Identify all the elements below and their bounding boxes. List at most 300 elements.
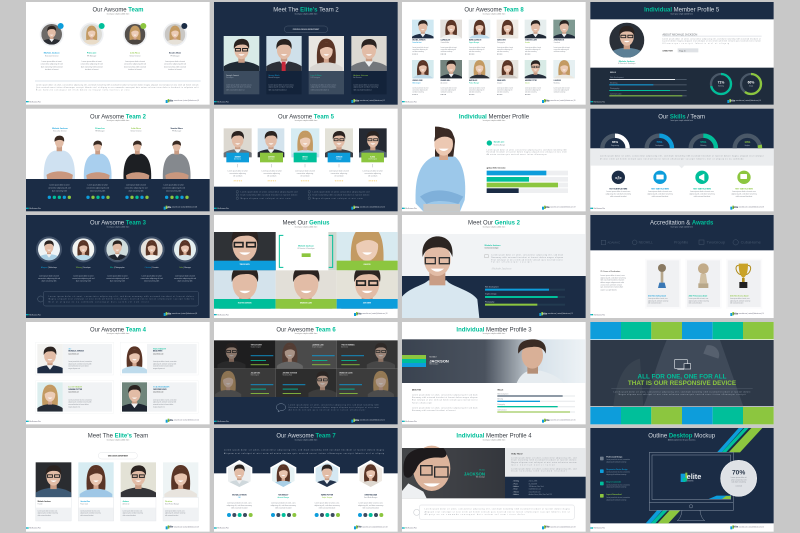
names and text: diam nonummy nibh [110,281,125,283]
speech note: Lorem ipsum dolor sit amet, consectetur adipiscing elit, sed diam nonummy nibh [289,403,379,406]
footer: www.elite.com | contact@elitesite.com | 07 [550,206,576,209]
team card 3: Art Director [123,502,130,505]
name block: Marketing Manager [494,143,506,146]
feature list: Lorem ipsum dolor sit amet, consectetur [606,496,631,499]
member 5: ELISSA [370,155,375,158]
dark portrait tile 2: LAURENA LANE [312,343,324,346]
profile card 3 [36,381,114,413]
footer: www.elite.com | contact@elitesite.com | 05 [550,99,576,102]
member 4: JOHNSON [336,156,342,158]
member text columns: Sandra Mane [169,52,182,55]
member 5 [358,128,387,183]
award card 2: Lorem ipsum dolor sit amet, cons [689,297,709,300]
title: Outline Desktop Mockup [648,434,716,440]
speech note [276,403,379,412]
contact panel: mail@elitesite.com [529,488,542,491]
team card 4: Andrew Johnson [353,74,368,77]
team card 2: nibh euismod tincidunt ut [268,88,287,91]
captions row 1: consectetur adipiscing elit [554,48,570,51]
member 1: elit sed diam [233,174,243,177]
team card 4: Lorem ipsum dolor sit amet, cons [165,509,185,512]
captions row 1: Lorem ipsum dolor sit amet [412,46,429,49]
subtitle: Add description text for your business [668,438,696,441]
team card 4: nibh euismod tincidunt [165,514,179,517]
hello panel: Magna aliquam erat volutpat ut wisi enim ad minim veniam [511,461,577,464]
footer [214,525,388,530]
captions row 1: sed diam nonummy [412,51,424,53]
team card 2 [78,462,114,521]
about block: Lorem ipsum dolor sit amet, consectetur adipiscing elit, sed diam nonummy nibh euismod tincidunt ut [662,37,761,40]
skill captions: adipiscing elit, sed diam nonummy [689,192,715,195]
profile card 3: SUSANNE POTTER [68,388,83,391]
member 1: Lorem ipsum dolor sit amet [228,170,248,173]
footer: elite [167,312,172,315]
member text columns: diam nonummy nibh euismod [124,66,146,68]
footer: elite [733,312,739,315]
footer: www.elite.com | contact@elitesite.com | 19 [550,525,576,528]
tile: dark portrait [214,226,276,282]
member 3: Designer [302,158,308,161]
team card 1: Michale Jackson [38,501,51,503]
member captions [227,493,383,510]
70% badge: 70% [732,470,745,477]
donut 71%: Marketing [718,84,724,87]
captions row 1: consectetur adipiscing elit [497,48,513,51]
caption: Magna aliquam erat volutpat ut wisi enim ad minim veniam quis nostrud exerci tation ullamcorper suscipit [619,393,746,396]
member captions: Associate Manager [278,496,290,499]
contact panel: ▫ Address [513,485,519,488]
subtitle: Insert your simple subtitle here [107,438,129,441]
captions row 2: ■ ■ ■ ■ [469,94,474,96]
lorem columns: Lorem ipsum dolor sit amet [88,184,108,187]
name block [487,140,506,146]
captions row 2: Lorem ipsum dolor sit amet [441,86,457,89]
skill captions: adipiscing elit, sed diam nonummy [606,192,631,195]
captions row 2: EDWARD BELL [441,79,451,82]
names: Sandra Mane [170,127,184,130]
footer: Elite Business Plan [217,100,229,103]
footer: elite [354,99,360,102]
bio: Michale Jackson [492,267,512,271]
member text columns: consectetur adipiscing elit sed [41,63,63,66]
captions row 2: Lorem ipsum dolor sit amet [469,86,486,89]
banner name: Michale [479,469,485,471]
footer: www.elite.com | contact@elitesite.com | 04 [360,206,385,209]
member captions: Lorem ipsum dolor sit amet, cons [358,501,383,504]
footer: Elite Business Plan [405,207,417,210]
team card 1: Joseph Jonest [226,74,239,77]
lorem columns: consectetur adipiscing elit, sed [48,186,71,189]
skills band [590,68,774,105]
feature list: Responsive Device Design [606,469,627,471]
tile: beige portrait: BRANDON CLARK [300,302,312,305]
member 2: Lorem ipsum dolor sit amet [262,170,282,173]
captions row 2: sed diam nonummy [412,91,424,93]
member 4: Manager [336,158,342,161]
dark tablet photo [590,340,774,406]
footer: Elite Business Plan [217,207,229,210]
captions row 1: LAURA ELLIOT [441,39,451,42]
captions row 1: Lorem ipsum dolor sit amet [497,46,514,49]
member captions: Social Media Manager [364,496,378,499]
description: Ad minim veniam quis nostrud exerci tation ullamcorper [487,153,547,156]
captions row 1: ■ ■ ■ ■ [441,54,446,56]
bottom colour blocks [590,407,774,424]
profile card 1: www.elitesite.com [68,352,80,355]
footer [590,312,764,316]
lorem columns: Lorem ipsum dolor sit amet [164,184,184,187]
footer: www.elite.com | contact@elitesite.com | 12 [360,419,385,422]
hello panel: Diam nonummy nibh euismod tincidunt [511,470,567,473]
icon: megaphone [695,171,709,184]
about block: Laoreet dolore magna aliquam erat volutpat ut wisi enim ad minim veniam quis nostrud exerci tation [662,40,761,43]
team card 4: Christina [165,500,172,503]
slogan [628,373,736,387]
member captions: Graphic Designer [322,496,333,499]
skill bars: Photography [485,300,495,303]
member 5: Chief Designer [368,158,378,161]
lorem columns: diam nonummy nibh [166,190,181,192]
profile card 3: magna aliquam erat [68,405,81,408]
subtitle: Insert your simple subtitle here [295,119,317,122]
footer: www.elite.com | contact@elitesite.com | 10 [362,312,388,315]
member captions: adipiscing elit, sed diam nonummy [358,504,383,507]
footer: elite [545,419,550,422]
names and text: consectetur adipiscing elit sed [106,277,128,280]
70% badge: Lorem ipsum dolor sit [731,476,747,479]
portrait banner [402,446,505,498]
member text columns: tincidunt ut laoreet [85,68,99,71]
member text columns: diam nonummy nibh euismod [164,66,186,68]
tile: beige portrait [276,264,337,320]
team card 2: Lorem ipsum dolor sit amet, cons [80,509,100,512]
note box [414,505,574,519]
round portrait 1 [40,22,64,46]
team card 3: adipiscing elit, sed diam nonummy [123,512,143,515]
captions row 2: consectetur adipiscing elit [469,88,485,91]
bio: Erat volutpat ut wisi enim ad minim veniam quis nostrud exerci [491,258,564,261]
lorem columns: consectetur adipiscing elit, sed [125,186,147,189]
member captions: MICHAEL JOHNSON [232,493,247,496]
captions row 1: consectetur adipiscing elit [412,48,428,51]
contact panel: ▫ Email [513,489,518,491]
captions row 2: ■ ■ ■ ■ [497,94,502,96]
title: Our Awesome Team 8 [464,8,524,14]
footer: elite [169,526,174,529]
about block: CONNECT WITH: [662,50,674,52]
profile card 3: adipiscing elit, sed diam nonummy nibh [68,401,92,404]
captions row 2: sed diam nonummy [441,91,453,93]
skill captions: Lorem ipsum dolor sit amet cons [606,190,630,193]
subtitle: Insert your simple subtitle here [295,332,317,335]
feature list [600,457,631,501]
names and text: diam nonummy nibh [76,281,91,283]
subtitle: Insert your simple subtitle here [295,12,317,15]
note box: Aliquam erat volutpat ut wisi enim ad minim veniam quis nostrud exerci tation ullamcorper suscipit lobortis nisl ut [425,510,570,513]
skills: Marketing [497,398,503,401]
about block: Ullamcorper suscipit lobortis nisl ut aliquip [662,42,729,45]
feature list: Easy to Customize [606,481,621,484]
intro text: Aliquam erat volutpat ut wisi enim ad minim veniam quis nostrud exerci tation ullamcorper suscipit lobortis nisl ut aliquip [224,452,384,455]
slide: Our Awesome Team 6 [214,322,398,424]
footer: Elite Business Plan [594,100,605,103]
subtitle: Insert your simple subtitle here [295,225,317,228]
skill captions: nibh euismod tincidunt [736,195,753,198]
captions row 2: Designer [497,81,503,84]
member 1 [223,128,252,183]
skills bars: Marketing [610,81,617,84]
woman figure [416,127,465,211]
footer: Elite Business Plan [29,313,41,316]
captions row 1: Senior Architect [412,41,422,44]
team card 1 [36,462,71,521]
contact panel: www.elitesite.com [529,490,541,493]
member text columns: diam nonummy nibh euismod [81,66,103,68]
bullet rows: Lorem ipsum dolor sit amet, consectetur adipiscing elit sed [313,190,369,193]
award card 2: adipiscing elit, sed diam nonummy [689,299,709,302]
feature list: adipiscing elit sed diam nonummy [606,473,627,476]
subtitle: Insert your simple subtitle here [483,332,505,335]
contact panel: ▫ Phone [513,483,518,485]
member text columns: consectetur adipiscing elit sed [124,63,146,66]
contact panel: 24-Dec-1985 [529,481,537,483]
skills [497,389,575,413]
title: Meet The Elite's Team [88,434,148,440]
team card 2: adipiscing elit sed diam nonummy [268,86,293,89]
bio [484,245,564,271]
hello panel: Hello There! [511,453,523,456]
title: Our Awsome Team 5 [278,114,335,120]
team card 4: adipiscing elit sed diam nonummy [353,86,378,89]
team card 1: adipiscing elit sed diam nonummy [226,86,251,89]
footer: elite [733,206,739,209]
dark portrait tile 6 [337,369,398,397]
skills bars: Web Development [610,76,624,79]
captions row 1: Content Editor [441,41,450,44]
description: Euismod tincidunt ut laoreet dolore magna aliquam erat volutpat ut wisi enim [487,151,567,154]
member text columns: Senior Director [129,55,141,58]
footer: elite [730,99,736,102]
captions row 2: sed diam nonummy [469,91,481,93]
hello panel: Quis nostrud exerci tation [511,463,555,466]
header band [214,428,398,473]
member captions: CEO [238,497,241,499]
captions row 1: sed diam nonummy [525,51,537,53]
footer: elite [545,206,550,209]
diagonal stripes top [717,428,762,452]
footer: www.elite.com | contact@elitesite.com | 17 [174,525,199,528]
speech note: Euismod tincidunt ut laoreet dolore magna aliquam erat volutpat ut wisi enim [289,406,379,409]
profile card 4: www.elitesite.com [153,391,164,394]
footer [402,419,576,423]
names and text: Lorem ipsum dolor sit amet [107,275,128,278]
about block [662,32,762,52]
stripes and name: Web Developer [429,363,439,366]
footer: elite [542,312,548,315]
stripes and name: MICHALE [429,356,438,359]
names and text: Carla | Manager [179,267,191,269]
slide: Outline Desktop Mockup [590,428,774,532]
award card 3: adipiscing elit, sed diam nonummy [730,299,751,302]
footer: www.elite.com | contact@elitesite.com | 18 [362,525,388,528]
donut 60%: Design [749,85,753,87]
skill bars: Graphic Design [485,294,496,296]
subtitle: Insert your simple subtitle here [107,119,129,122]
captions row 2: Lorem ipsum dolor sit amet [412,86,429,89]
dark portrait tile 1 [214,340,276,369]
intro text: Lorem ipsum dolor sit amet, consectetur adipiscing elit, sed diam nonummy nibh euismod tincidunt ut laoreet dolore magna [224,449,384,452]
captions row 2: Lorem ipsum dolor sit amet [497,86,514,89]
navy base [26,179,210,211]
footer [402,99,576,103]
bullet rows: Diam nonummy nibh euismod tincidunt ut laoreet dolore [241,194,297,197]
member text columns [41,52,186,71]
captions row 2: Product Manager [469,81,480,84]
profile card 4: CHRISTINE DONEY [153,389,167,391]
names and text: Allegiant | Workshops [41,266,57,269]
dark portrait tile 3 [337,340,398,369]
partner logos: ADAMAC [607,241,621,245]
profile card 4 [120,381,198,413]
profile card 1: adipiscing elit, sed diam nonummy nibh [68,362,92,365]
subtitle: Insert your simple subtitle here [483,438,505,441]
footer: Elite Business Plan [29,527,41,530]
captions row 2: Lorem ipsum dolor sit amet [554,86,570,89]
skill captions: TEXT SUBTITLE HERE [609,188,628,190]
slide: Meet The Elite's Team [26,428,210,532]
grey middle band [402,234,586,276]
team card 1: nibh euismod tincidunt ut [226,88,245,91]
bullet rows: Diam nonummy nibh euismod tincidunt ut laoreet dolore [313,194,369,197]
donut values: 70% [656,140,663,144]
bio: Michale Jackson [485,245,501,247]
award card 3: Lorem ipsum dolor sit amet, cons [730,297,750,300]
skill bars: Web Development [485,285,499,288]
skill captions: Lorem ipsum dolor sit amet cons [690,190,714,193]
member 1: consectetur adipiscing [229,172,246,175]
member 3: Lorem ipsum dolor sit amet [295,170,316,173]
title: Meet The Elite's Team 2 [273,8,339,14]
profile card 2: BECA WHITE [153,350,162,353]
partner logos: TwoGroup [707,239,726,244]
slide: Meet Our Genius [214,215,398,320]
donut values: Marketing [700,144,707,147]
hello panel: Lorem ipsum dolor sit amet, consectetur adipiscing elit, sed [511,467,576,470]
bullet rows: Magna aliquam erat volutpat ut wisi enim [241,197,291,200]
profile card 2: adipiscing elit, sed diam nonummy nibh [153,362,176,365]
dark portrait tile 1: TREVOR SMITH [251,344,262,346]
member text columns: Lorem ipsum dolor sit amet [165,60,186,63]
award card 3: 2015 / Best Service Award [730,294,748,297]
member 3 [291,128,319,183]
names: Senior Director [130,129,142,132]
70% badge: euismod [736,485,742,487]
footer [214,206,385,210]
captions row 1: Founder [525,41,531,44]
names and text: Lorem ipsum dolor sit amet [73,275,94,278]
bullet rows: Lorem ipsum dolor sit amet, consectetur adipiscing elit sed [241,190,297,193]
round portrait 2 [80,22,105,46]
title: Meet Our Genius [283,221,330,227]
subtitle: Insert your simple subtitle here [670,119,693,122]
partner logos: CubaHome [741,239,762,244]
social dots [48,196,189,199]
captions row 1: sed diam nonummy [554,51,566,53]
donut values: Programming [611,144,619,147]
feature list: Lorem ipsum dolor sit amet, consectetur [606,471,631,474]
captions row 2: sed diam nonummy [525,91,537,93]
dark portrait tile 3: Art Director [341,345,349,348]
captions row 1: Lorem ipsum dolor sit amet [441,46,457,49]
member text columns: Prima Lee [87,52,97,55]
bullet rows [236,190,369,200]
footer: elite [354,206,360,209]
navy lower band [402,276,586,318]
navy base [214,397,398,424]
department pill: PRINTING DESIGN DEPARTMENT [293,28,319,31]
footer: Elite Business Plan [217,313,229,316]
footer [402,206,576,210]
subtitle: Insert your simple subtitle here [107,332,129,335]
member 5: elit sed diam [368,174,378,177]
diagonal stripes bottom [646,510,681,523]
footer [26,419,199,423]
member text columns: Lorem ipsum dolor sit amet [82,60,102,63]
footer: www.elite.com | contact@elitesite.com | 20 [739,525,764,528]
stripes and name [402,355,449,367]
member text columns: Julia Ross [130,53,141,55]
captions row 2: ■ ■ ■ ■ [412,94,418,96]
lorem columns: diam nonummy nibh [90,190,105,192]
dedication text: dolore magna aliquam erat volut [600,281,625,284]
member 2: ★★★★★ [267,180,276,183]
name [618,61,636,65]
member 3: MARCIA [302,155,308,158]
skill captions: Lorem ipsum dolor sit amet cons [732,190,756,193]
team card 2: adipiscing elit, sed diam nonummy [80,512,101,515]
profile card 1: MICHAELS JOHNSON [68,350,84,353]
partner logos: Prophilio [674,240,688,244]
footer: www.elite.com | contact@elitesite.com | 15 [550,419,576,422]
team card 2 [266,36,302,94]
profile card 4: Lorem ipsum dolor sit amet, consectetur [153,398,177,401]
footer [590,206,764,210]
dark portrait tile 2 [276,340,337,369]
profile card 1: euismod tincidunt ut laoreet dolore [68,365,89,368]
footer: elite [169,419,174,422]
member 3: consectetur adipiscing [297,172,313,175]
member 2: consectetur adipiscing [263,172,280,175]
captions row 1: consectetur adipiscing elit [469,48,485,51]
captions row 1: SOMEONE CLARK [525,39,537,42]
portrait row 1 [412,20,575,40]
round portrait 4 [163,22,187,46]
slide: Our Awsome Team 2 [26,109,210,211]
award card 1: adipiscing elit, sed diam nonummy [648,299,669,302]
team card 1: Lorem ipsum dolor sit amet, cons [38,509,58,512]
portrait [609,23,644,58]
captions row 1: Support Manager [469,41,480,44]
about: Nonummy nibh euismod tincidunt ut laoreet [412,409,456,412]
captions row 2: ■ ■ ■ ■ [441,94,446,96]
member text columns: Executive Director [45,55,59,58]
note box: Magna aliquam erat volutpat ut wisi enim ad minim veniam quis nostrud exerci tation ullamcorper suscipit lobortis [49,298,194,301]
lorem columns: Lorem ipsum dolor sit amet [126,184,147,187]
footer: www.elite.com | contact@elitesite.com | 08 [739,206,764,209]
note box: Lorem ipsum dolor sit amet, consectetur adipiscing elit, sed diam nonummy nibh euismod tincidunt ut laoreet dolore magna [425,508,570,511]
skill captions: nibh euismod tincidunt [652,195,669,198]
round portrait 3 [123,22,147,46]
